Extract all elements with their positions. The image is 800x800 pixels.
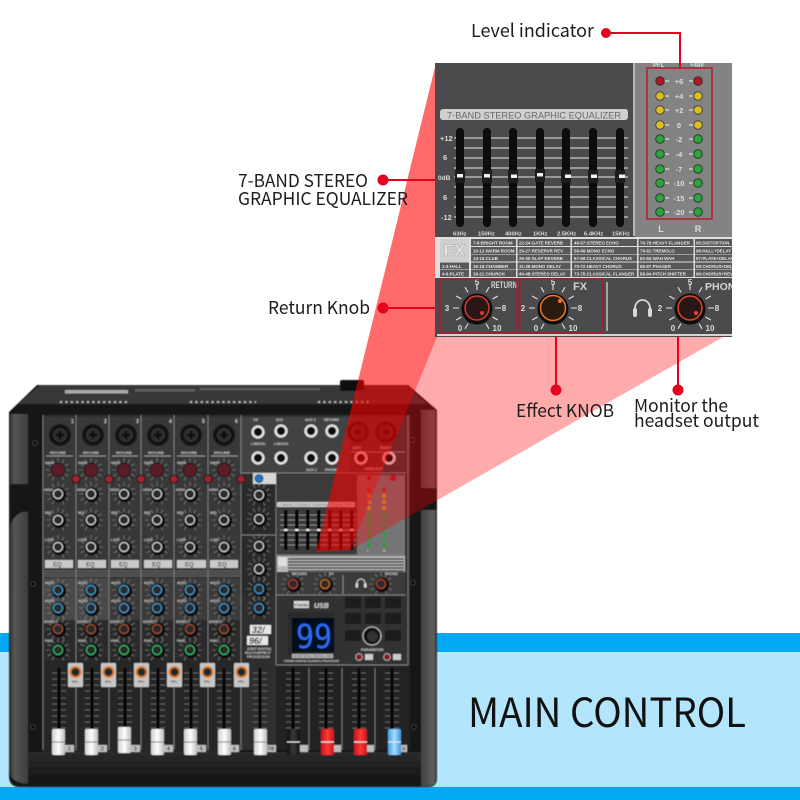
level indicator LEDs: +4 xyxy=(675,92,684,101)
EQ dB scale: 0dB xyxy=(438,175,451,182)
master fader caps xyxy=(52,729,401,755)
channel numbers and input labels: MID xyxy=(144,511,151,515)
channel numbers and input labels: GAIN xyxy=(177,461,186,465)
phone knob: 2 xyxy=(658,304,663,313)
callout: graphic equalizer xyxy=(238,167,435,211)
channel numbers and input labels: GAIN xyxy=(78,461,87,465)
channel numbers and input labels: LOW xyxy=(210,538,219,542)
fader number tags: 2 xyxy=(101,746,104,752)
channel numbers and input labels xyxy=(44,419,238,643)
channel numbers and input labels: AUX2 xyxy=(111,599,121,603)
return knob: 5 xyxy=(475,278,480,287)
display section: 24-BIT DUAL SIGNAL DSP xyxy=(293,654,332,658)
FX table: 19-21:CHURCH xyxy=(473,272,505,276)
mixer FX table xyxy=(277,556,405,572)
FX logo box: FX xyxy=(444,241,466,260)
rear input jacks: L/MONO xyxy=(251,442,266,446)
rear input jacks: L/MONO xyxy=(274,442,289,446)
channel numbers and input labels: HIGH xyxy=(176,488,185,492)
FX table: 98:CHORUS+DEL xyxy=(696,264,733,269)
display section: STEREO GRAPHIC EQ DIGITAL PROCESSOR xyxy=(284,659,339,663)
callout: level indicator xyxy=(471,17,680,68)
channel numbers and input labels: LOW xyxy=(144,538,153,542)
channel numbers and input labels: HIGH xyxy=(209,488,218,492)
fader tracks xyxy=(52,668,399,730)
level indicator LEDs: L xyxy=(658,224,664,234)
fader number tags: 5 xyxy=(200,746,203,752)
fader number tags: 4 xyxy=(167,746,170,752)
channel numbers and input labels: PAN xyxy=(210,639,218,643)
32/96 logo: 96/ xyxy=(249,636,263,646)
channel numbers and input labels: EFFECT xyxy=(110,620,125,624)
FX table: 31-39:MONO DELAY xyxy=(519,264,561,269)
display section: Fomix xyxy=(295,602,309,608)
callout: headset output: headset output xyxy=(634,407,759,433)
FX logo box xyxy=(440,239,469,262)
FX table: 1-3:HALL xyxy=(442,264,462,269)
background band: light blue panel xyxy=(0,652,800,787)
FX table: 10-12:WARM ROOM xyxy=(473,248,515,254)
rear input jacks: AUX 1 xyxy=(305,418,316,422)
FX table: 79-81:TREMOLO xyxy=(640,248,675,254)
level indicator LEDs: -7 xyxy=(676,165,682,174)
channel numbers and input labels: MID xyxy=(210,511,217,515)
EQ label strips: EQ xyxy=(152,562,161,568)
level indicator LEDs: -20 xyxy=(674,208,684,217)
channel numbers and input labels: MIC/LINE xyxy=(50,451,66,455)
rear input jacks: RIGHT xyxy=(380,446,392,450)
32/96 logo xyxy=(245,625,273,659)
FX knob: 8 xyxy=(578,304,583,313)
control buttons and parameter knob: PARAMETER xyxy=(361,648,384,652)
EQ frequency labels: 63Hz xyxy=(453,232,467,238)
rear input jacks: MAIN OUT xyxy=(365,467,384,471)
EQ label strips: EQ xyxy=(119,562,128,568)
callout: return knob xyxy=(268,294,435,320)
PFL buttons: PFL xyxy=(138,680,146,684)
level indicator LEDs: +6 xyxy=(675,77,683,86)
FX table: 22-24:GATE REVERB xyxy=(519,240,563,246)
channel numbers and input labels: AUX2 xyxy=(177,599,187,603)
channel numbers and input labels: LOW xyxy=(177,538,186,542)
level indicator LEDs: -15 xyxy=(674,194,684,203)
panel background xyxy=(435,63,732,337)
FX table: 29-30:SLAP REVERB xyxy=(519,256,563,261)
channel numbers and input labels: PAN xyxy=(111,639,119,643)
FX label: FX xyxy=(573,281,588,293)
level indicator LEDs xyxy=(653,63,704,234)
channel numbers and input labels: PAN xyxy=(144,639,152,643)
EQ frequency labels: 1KHz xyxy=(533,232,548,238)
FX table: 67-69:CLASSICAL CHORUS xyxy=(574,256,632,261)
callout: return knob: Return Knob xyxy=(268,294,370,320)
FX table: 82-84:WAH WAH xyxy=(640,256,674,261)
phone label: PHONE xyxy=(705,281,742,293)
32/96 logo: 32BIT DIGITAL xyxy=(247,647,273,651)
channel numbers and input labels: 3 xyxy=(136,419,139,425)
channel numbers and input labels: EFFECT xyxy=(176,620,191,624)
front face plate xyxy=(43,415,410,750)
background band: upper blue stripe xyxy=(0,633,800,652)
effect number display: 99 xyxy=(296,617,332,656)
channel numbers and input labels: AUX1 xyxy=(144,581,154,585)
EQ frequency labels: 6.4KHz xyxy=(584,232,603,238)
FX table: 49-57:STEREO ECHO xyxy=(574,240,619,246)
FX table: 7-9:BRIGHT ROOM xyxy=(473,240,513,246)
channel numbers and input labels: MIC/LINE xyxy=(214,451,230,455)
FX knob: 2 xyxy=(521,304,526,313)
FX table: 99:CHORUS+REV xyxy=(696,272,733,276)
PFL buttons: PFL xyxy=(171,680,179,684)
32/96 logo: 32/ xyxy=(252,625,266,635)
FX table: 58-66:MONO ECHO xyxy=(574,248,615,254)
FX table: 76-78:HEAVY FLANGER xyxy=(640,240,691,246)
channel numbers and input labels: AUX1 xyxy=(210,581,220,585)
fader number tags: X xyxy=(402,746,406,752)
rear input jacks: PHONE xyxy=(325,468,338,472)
EQ frequency labels: 2.5KHz xyxy=(557,232,576,238)
return knob: 3 xyxy=(445,304,450,313)
FX table: 85-87:PHASER xyxy=(640,264,672,269)
FX table: 88-94:PITCH SHIFTER xyxy=(640,272,687,276)
FX knob: 10 xyxy=(569,324,578,333)
channel numbers and input labels: GAIN xyxy=(144,461,153,465)
highlight beam: light pink xyxy=(350,337,723,550)
screws xyxy=(30,438,416,730)
channel numbers and input labels: 1 xyxy=(71,419,74,425)
channel strip panels xyxy=(43,415,410,752)
callout: graphic equalizer: 7-BAND STEREO xyxy=(238,167,368,193)
channel numbers and input labels: GAIN xyxy=(210,461,219,465)
mixer level meter: R xyxy=(383,549,386,553)
callout: headset output xyxy=(634,337,759,433)
phone knob: 8 xyxy=(715,304,720,313)
level indicator LEDs: +2 xyxy=(675,106,683,115)
side handle notches xyxy=(10,484,437,530)
return knob: 10 xyxy=(493,324,502,333)
FX table: 97:PLATE+DELAY xyxy=(696,256,734,261)
EQ heading: 7-BAND STEREO GRAPHIC EQUALIZER xyxy=(447,110,621,122)
level indicator LEDs: -4 xyxy=(676,150,683,159)
phone knob: 5 xyxy=(688,278,693,287)
callout: graphic equalizer: GRAPHIC EQUALIZER xyxy=(238,185,408,211)
EQ sliders xyxy=(454,128,628,227)
channel numbers and input labels: EFFECT xyxy=(77,620,92,624)
display section xyxy=(284,601,339,663)
channel numbers and input labels: AUX2 xyxy=(78,599,88,603)
level indicator LEDs: R xyxy=(695,224,702,234)
channel numbers and input labels: 5 xyxy=(202,419,205,425)
PFL buttons: PFL xyxy=(105,680,113,684)
EQ dB scale: +12 xyxy=(440,134,453,143)
background band: bottom blue stripe xyxy=(0,787,800,800)
bottom lip xyxy=(28,752,421,787)
top lid xyxy=(18,380,427,404)
level indicator LEDs: +48V xyxy=(690,63,704,69)
mixer EQ section xyxy=(277,502,356,550)
channel numbers and input labels: AUX1 xyxy=(111,581,121,585)
rear input jacks xyxy=(251,418,397,472)
channel numbers and input labels: LOW xyxy=(111,538,120,542)
control buttons and parameter knob xyxy=(345,597,401,660)
rear input jacks: LEFT xyxy=(352,446,362,450)
rear input jacks: AUX 2 xyxy=(306,468,317,472)
channel numbers and input labels: 6 xyxy=(235,419,238,425)
EQ label strips: EQ xyxy=(86,562,95,568)
PFL buttons: PFL xyxy=(72,680,80,684)
EQ label strips: EQ xyxy=(185,562,194,568)
channel numbers and input labels: HIGH xyxy=(110,488,119,492)
PFL buttons: PFL xyxy=(204,680,212,684)
mixer EQ section: 7-BAND STEREO GRAPHIC EQUALIZER xyxy=(279,502,353,507)
channel numbers and input labels: AUX2 xyxy=(144,599,154,603)
phone knob xyxy=(658,278,720,333)
channel numbers and input labels: PAN xyxy=(177,639,185,643)
EQ dB scale: 6 xyxy=(443,153,447,162)
effect knobs xyxy=(46,617,236,639)
FX table: 13-15:CLUB xyxy=(473,256,498,261)
FX table: 40-48:STEREO DELAY xyxy=(519,272,566,276)
EQ label strips: EQ xyxy=(53,562,62,568)
channel numbers and input labels: MIC/LINE xyxy=(116,451,132,455)
FX table: 16-18:CHAMBER xyxy=(473,264,509,269)
return knob xyxy=(445,278,507,333)
fader number tags: 7/8 xyxy=(267,746,274,752)
callout: level indicator: Level indicator xyxy=(471,17,595,43)
return knob: 8 xyxy=(502,304,507,313)
FX table xyxy=(435,237,734,278)
mixer return, FX and phone knobs xyxy=(281,572,398,594)
channel numbers and input labels: HIGH xyxy=(44,488,53,492)
fader number tags: 1 xyxy=(68,746,71,752)
right edge cover xyxy=(732,237,772,278)
channel combo inputs xyxy=(49,424,235,446)
phone knob: 0 xyxy=(671,324,676,333)
channel numbers and input labels: GAIN xyxy=(45,461,54,465)
channel numbers and input labels: PAN xyxy=(45,639,53,643)
channel numbers and input labels: HIGH xyxy=(143,488,152,492)
32/96 logo: PROCESSOR xyxy=(247,655,270,659)
FX table: 95:DISTORTION xyxy=(696,240,729,246)
channel numbers and input labels: MIC/LINE xyxy=(181,451,197,455)
level indicator LEDs: PFL xyxy=(653,63,665,69)
mixer level meter: L xyxy=(367,549,370,553)
FX table: 25-27:RESERVR REV xyxy=(519,248,563,254)
EQ frequency labels: 400Hz xyxy=(505,232,522,238)
channel numbers and input labels: GAIN xyxy=(111,461,120,465)
channel numbers and input labels: MIC/LINE xyxy=(148,451,164,455)
return label: RETURN xyxy=(491,280,517,290)
level indicator LEDs: -2 xyxy=(676,135,682,144)
mixer return, FX and phone knobs: RETURN xyxy=(292,572,307,576)
PFL buttons xyxy=(68,663,249,687)
channel numbers and input labels: AUX1 xyxy=(78,581,88,585)
gain knobs and clip buttons xyxy=(46,458,246,484)
channel numbers and input labels: EFFECT xyxy=(143,620,158,624)
return knob: 0 xyxy=(458,324,463,333)
level indicator LEDs: -10 xyxy=(674,179,684,188)
channel numbers and input labels: 4 xyxy=(169,419,172,425)
level indicator frame xyxy=(647,68,712,219)
channel numbers and input labels: AUX1 xyxy=(177,581,187,585)
channel numbers and input labels: MID xyxy=(78,511,85,515)
channel numbers and input labels: AUX1 xyxy=(45,581,55,585)
channel numbers and input labels: MID xyxy=(111,511,118,515)
EQ frequency labels: 150Hz xyxy=(478,232,495,238)
EQ dB scale xyxy=(438,134,453,222)
channel numbers and input labels: MIC/LINE xyxy=(83,451,99,455)
32/96 logo: MULTI-EFFECT xyxy=(245,651,272,655)
channel numbers and input labels: LOW xyxy=(45,538,54,542)
left side handle xyxy=(9,414,30,784)
FX knob: 5 xyxy=(551,278,556,287)
EQ frequency labels xyxy=(453,232,630,238)
title: main control: MAIN CONTROL xyxy=(468,681,746,739)
channel numbers and input labels: AUX2 xyxy=(210,599,220,603)
panel bottom edge xyxy=(437,334,732,336)
FX table: 70-72:HEAVY CHORUS xyxy=(574,264,622,269)
channel numbers and input labels: 2 xyxy=(104,419,107,425)
panel divider at phones xyxy=(606,282,608,331)
rear input jacks: 7/8 xyxy=(253,418,258,422)
EQ knobs xyxy=(46,482,271,579)
AUX knobs xyxy=(46,577,271,618)
channel numbers and input labels: LOW xyxy=(78,538,87,542)
callout: effect knob: Effect KNOB xyxy=(516,397,614,423)
FX knob: 0 xyxy=(534,324,539,333)
channel numbers and input labels: AUX2 xyxy=(45,599,55,603)
EQ frequency labels: 15KHz xyxy=(612,232,630,238)
phone knob: 10 xyxy=(706,324,715,333)
mixer level meter xyxy=(367,475,396,553)
channel numbers and input labels: MID xyxy=(45,511,52,515)
fader number tags xyxy=(65,745,407,752)
fader number tags: 6 xyxy=(233,746,236,752)
icon: headphones xyxy=(633,300,652,317)
channel numbers and input labels: MID xyxy=(177,511,184,515)
display section: USB xyxy=(314,603,329,610)
level indicator LEDs: 0 xyxy=(677,121,681,130)
EQ dB scale: -12 xyxy=(441,213,452,222)
fader number tags: 3 xyxy=(134,746,137,752)
highlight beam: strong red xyxy=(316,63,437,552)
FX table: 96:HALL+DELAY xyxy=(696,248,731,254)
channel numbers and input labels: PAN xyxy=(78,639,86,643)
channel numbers and input labels: HIGH xyxy=(77,488,86,492)
panel dividers xyxy=(633,63,635,236)
EQ dB scale: 6 xyxy=(443,193,447,202)
level meter background xyxy=(635,63,732,237)
PFL buttons: PFL xyxy=(238,680,246,684)
mixer return, FX and phone knobs: FX xyxy=(329,572,334,576)
zoomed control panel xyxy=(435,63,772,337)
rear input jacks: 9/10 xyxy=(276,418,283,422)
right side handle xyxy=(421,410,437,786)
mixer body shell xyxy=(9,385,437,787)
FX table: 73-75:CLASSICAL FLANGER xyxy=(574,272,635,276)
mixer console xyxy=(9,380,437,787)
callout: headset output: Monitor the xyxy=(634,392,728,418)
callout: effect knob xyxy=(516,337,614,423)
rear input jacks: RETURN xyxy=(324,418,339,422)
mono switch xyxy=(253,473,276,484)
channel numbers and input labels: EFFECT xyxy=(209,620,224,624)
EQ label strips xyxy=(44,560,240,576)
pan knobs xyxy=(46,638,236,660)
mixer return, FX and phone knobs: PHONE xyxy=(385,572,398,576)
channel fader caps xyxy=(52,727,267,755)
EQ label strips: EQ xyxy=(218,562,227,568)
FX knob xyxy=(521,278,583,333)
FX table: 4-6:PLATE xyxy=(442,272,464,276)
red frames around knobs xyxy=(440,279,603,333)
channel numbers and input labels: EFFECT xyxy=(44,620,59,624)
